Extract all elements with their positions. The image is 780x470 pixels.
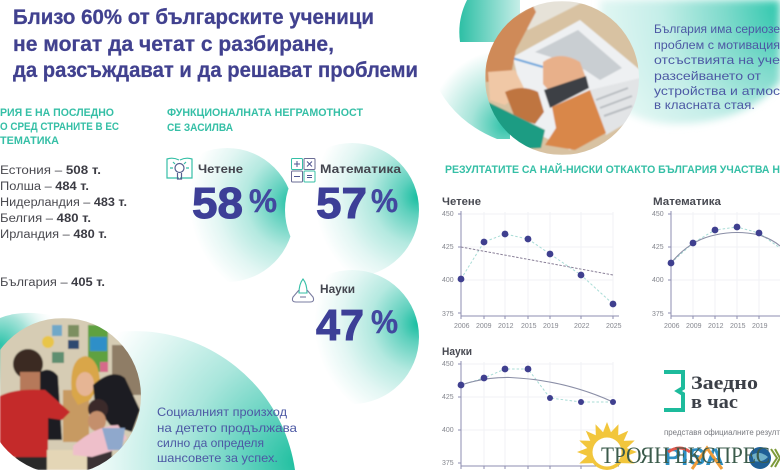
chart: reading: 2015 <box>521 323 537 330</box>
chart: science: 450 <box>442 361 454 368</box>
text: social background: Социалният произход <box>157 405 287 419</box>
gradient blob: reading <box>160 148 294 282</box>
chart: reading: 2009 <box>476 323 492 330</box>
value: reading: 58 <box>192 179 243 228</box>
country ranking list: Белгия – 480 т. <box>0 213 91 225</box>
label: reading: Четене <box>198 162 243 176</box>
chart: maths: 425 <box>652 244 664 251</box>
chart: science: 425 <box>442 394 454 401</box>
chart: maths: 2015 <box>730 323 746 330</box>
chart: maths: Математика <box>653 196 722 208</box>
gradient blob: bottom left <box>0 313 295 470</box>
chart: reading: 375 <box>442 311 454 318</box>
value: science: % <box>371 304 398 340</box>
value: science <box>316 301 398 350</box>
text: motivation problem: в класната стая. <box>654 98 755 112</box>
text: motivation problem: отсъствията на уче <box>654 53 780 67</box>
photo: students writing at desk <box>485 1 640 155</box>
chart: reading: 2012 <box>498 323 514 330</box>
chart: maths: 375 <box>652 311 664 318</box>
chart: maths: 2009 <box>686 323 702 330</box>
country ranking list: Ирландия – 480 т. <box>0 229 107 241</box>
chart: reading <box>442 196 622 330</box>
heading: last place in EU: О СРЕД СТРАНИТЕ В ЕС <box>0 121 119 133</box>
text: social background: на детето продължава <box>157 421 297 435</box>
text: social background: силно да определя <box>157 436 264 450</box>
heading: last place in EU: ТЕМАТИКА <box>0 135 59 147</box>
heading: functional illiteracy: СЕ ЗАСИЛВА <box>167 122 233 134</box>
title: да разсъждават и да решават проблеми <box>13 59 418 82</box>
label: maths: Математика <box>320 162 401 176</box>
heading: functional illiteracy: ФУНКЦИОНАЛНАТА НЕГРАМОТНОСТ <box>167 107 363 119</box>
chart: reading: 2019 <box>543 323 559 330</box>
chart: maths: 2006 <box>664 323 680 330</box>
logo: Zaedno v chas: Заедно <box>691 373 758 394</box>
chart: reading: 2025 <box>606 323 622 330</box>
chart: reading: Четене <box>442 196 481 208</box>
title <box>13 6 418 82</box>
value: reading <box>192 179 277 228</box>
chart: science: 375 <box>442 460 454 467</box>
heading: functional illiteracy <box>167 107 363 134</box>
chart: reading: 2022 <box>574 323 590 330</box>
value: maths: % <box>371 183 398 219</box>
title: не могат да четат с разбиране, <box>13 33 334 56</box>
value: maths: 57 <box>316 179 367 228</box>
chart: maths: 2012 <box>708 323 724 330</box>
chart: maths: 2019 <box>752 323 768 330</box>
value: maths <box>316 179 398 228</box>
chart: maths: 450 <box>652 211 664 218</box>
country ranking list: Нидерландия – 483 т. <box>0 197 127 209</box>
chart: science <box>442 346 619 469</box>
gradient blob: science <box>285 270 419 404</box>
heading: last place in EU <box>0 107 119 147</box>
country ranking list <box>0 165 127 289</box>
chart: reading: 400 <box>442 277 454 284</box>
gradient blob: behind top photo <box>432 0 520 139</box>
chart: science: 400 <box>442 427 454 434</box>
chart: maths <box>652 196 780 330</box>
photo: teacher with pupils <box>0 318 142 470</box>
icon: book with light bulb <box>167 158 192 179</box>
logo: Zaedno v chas: в час <box>691 392 738 413</box>
text: social background: шансовете за успех. <box>157 451 278 465</box>
text: motivation problem: проблем с мотивация <box>654 38 780 52</box>
icon: rocket <box>292 279 314 302</box>
text: motivation problem: устройства и атмос <box>654 84 780 98</box>
country ranking list: България – 405 т. <box>0 277 105 289</box>
logo: PISA <box>664 444 780 470</box>
value: reading: % <box>249 183 277 219</box>
title: Близо 60% от българските ученици <box>13 6 374 29</box>
chart: reading: 425 <box>442 244 454 251</box>
country ranking list: Естония – 508 т. <box>0 165 101 177</box>
icon: calculator <box>292 158 315 182</box>
chart: reading: 450 <box>442 211 454 218</box>
chart: maths: 400 <box>652 277 664 284</box>
logo: Troyan Express sun <box>577 422 637 470</box>
text: motivation problem: разсейването от <box>654 69 762 83</box>
gradient blob: top right <box>600 0 780 124</box>
text: social background <box>157 405 297 465</box>
chart: science: Науки <box>442 346 472 358</box>
text: motivation problem: България има сериозе <box>654 22 780 36</box>
country ranking list: Полша – 484 т. <box>0 181 89 193</box>
gradient blob: maths <box>285 143 419 277</box>
text: motivation problem <box>654 22 780 112</box>
chart: reading: 2006 <box>454 323 470 330</box>
value: science: 47 <box>316 301 364 350</box>
heading: last place in EU: РИЯ Е НА ПОСЛЕДНО <box>0 107 114 119</box>
caption: presents official results: представя официалните резулт <box>664 428 780 437</box>
logo: Zaedno v chas <box>664 372 758 413</box>
label: science: Науки <box>320 282 355 296</box>
watermark: Troyan Express: ТРОЯН ЕКСПРЕС <box>601 443 770 468</box>
